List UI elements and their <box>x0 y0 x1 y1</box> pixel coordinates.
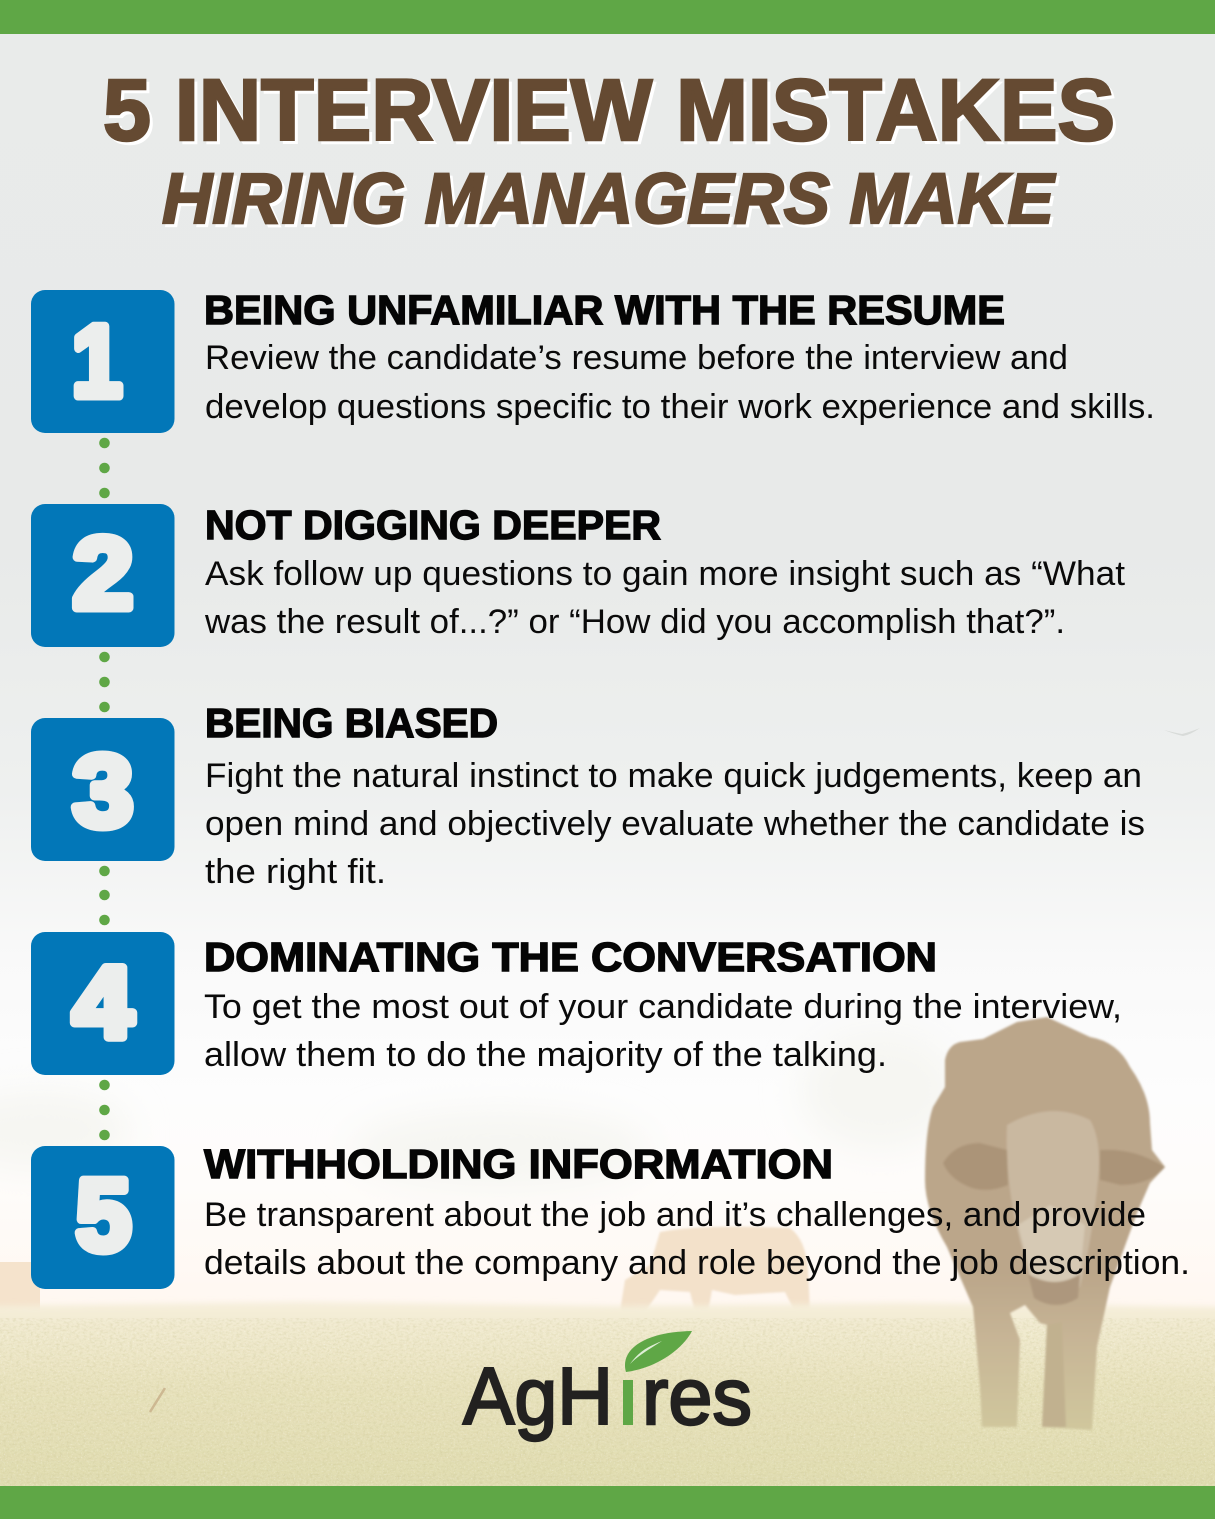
top green bar <box>0 0 1215 34</box>
body 2 <box>204 555 1126 641</box>
bottom green bar <box>0 1486 1215 1519</box>
mistake 4 <box>31 932 1122 1075</box>
body 4 <box>204 988 1122 1074</box>
distant trees <box>0 1030 960 1190</box>
number badge 5 <box>31 1146 174 1289</box>
cow head <box>1007 1111 1099 1297</box>
logo wordmark: res <box>642 1352 752 1442</box>
icon: leaf <box>625 1331 692 1372</box>
body 5: Be transparent about the job and it’s challenges, and provide <box>204 1196 1146 1234</box>
heading 4: DOMINATING THE CONVERSATION <box>204 934 937 980</box>
cow <box>925 1017 1165 1430</box>
body 3: Fight the natural instinct to make quick judgements, keep an <box>205 757 1142 795</box>
heading 3: BEING BIASED <box>205 700 498 746</box>
bird <box>1164 728 1200 736</box>
heading 2: NOT DIGGING DEEPER <box>205 502 661 548</box>
body 5 <box>204 1196 1190 1282</box>
distant cow at left edge <box>0 1262 40 1314</box>
mistake 1 <box>31 287 1155 433</box>
heading 1: BEING UNFAMILIAR WITH THE RESUME <box>204 287 1005 333</box>
title line 1: 5 INTERVIEW MISTAKES <box>103 62 1115 159</box>
heading 5: WITHHOLDING INFORMATION <box>204 1141 833 1187</box>
body 2: Ask follow up questions to gain more insight such as “What <box>205 555 1126 593</box>
mistake 3 <box>31 700 1145 891</box>
number badge 3 <box>31 718 174 861</box>
distant grazing cow <box>620 1227 810 1312</box>
connector dots 2-3 <box>99 652 110 712</box>
number badge 4: 4 <box>73 947 133 1059</box>
number badge 4 <box>31 932 174 1075</box>
logo wordmark: AgH <box>463 1352 613 1442</box>
connector dots 4-5 <box>99 1080 110 1140</box>
logo wordmark <box>463 1352 752 1442</box>
body 1: Review the candidate’s resume before the interview and <box>205 339 1068 377</box>
number badge 2 <box>31 504 174 647</box>
number badge 3: 3 <box>73 736 133 848</box>
connector dots 3-4 <box>99 866 110 925</box>
title line 2: HIRING MANAGERS MAKE <box>162 160 1057 239</box>
number badge 2: 2 <box>73 518 133 630</box>
body 3: the right fit. <box>205 853 386 891</box>
body 3 <box>205 757 1145 891</box>
body 3: open mind and objectively evaluate whether the candidate is <box>205 805 1145 843</box>
body 2: was the result of...?” or “How did you accomplish that?”. <box>204 603 1065 641</box>
title <box>103 62 1115 239</box>
mistake 2 <box>31 502 1126 647</box>
connector dots 1-2 <box>99 438 110 498</box>
body 1: develop questions specific to their work experience and skills. <box>205 388 1155 426</box>
logo: AgHires <box>463 1331 752 1442</box>
body 4: allow them to do the majority of the talking. <box>204 1036 887 1074</box>
number badge 1: 1 <box>72 306 122 418</box>
number badge 5: 5 <box>76 1160 131 1272</box>
body 1 <box>205 339 1155 426</box>
number badge 1 <box>31 290 174 433</box>
body 5: details about the company and role beyond the job description. <box>204 1244 1190 1282</box>
mistake 5 <box>31 1141 1190 1289</box>
body 4: To get the most out of your candidate during the interview, <box>204 988 1122 1026</box>
grass field <box>0 1302 1215 1490</box>
